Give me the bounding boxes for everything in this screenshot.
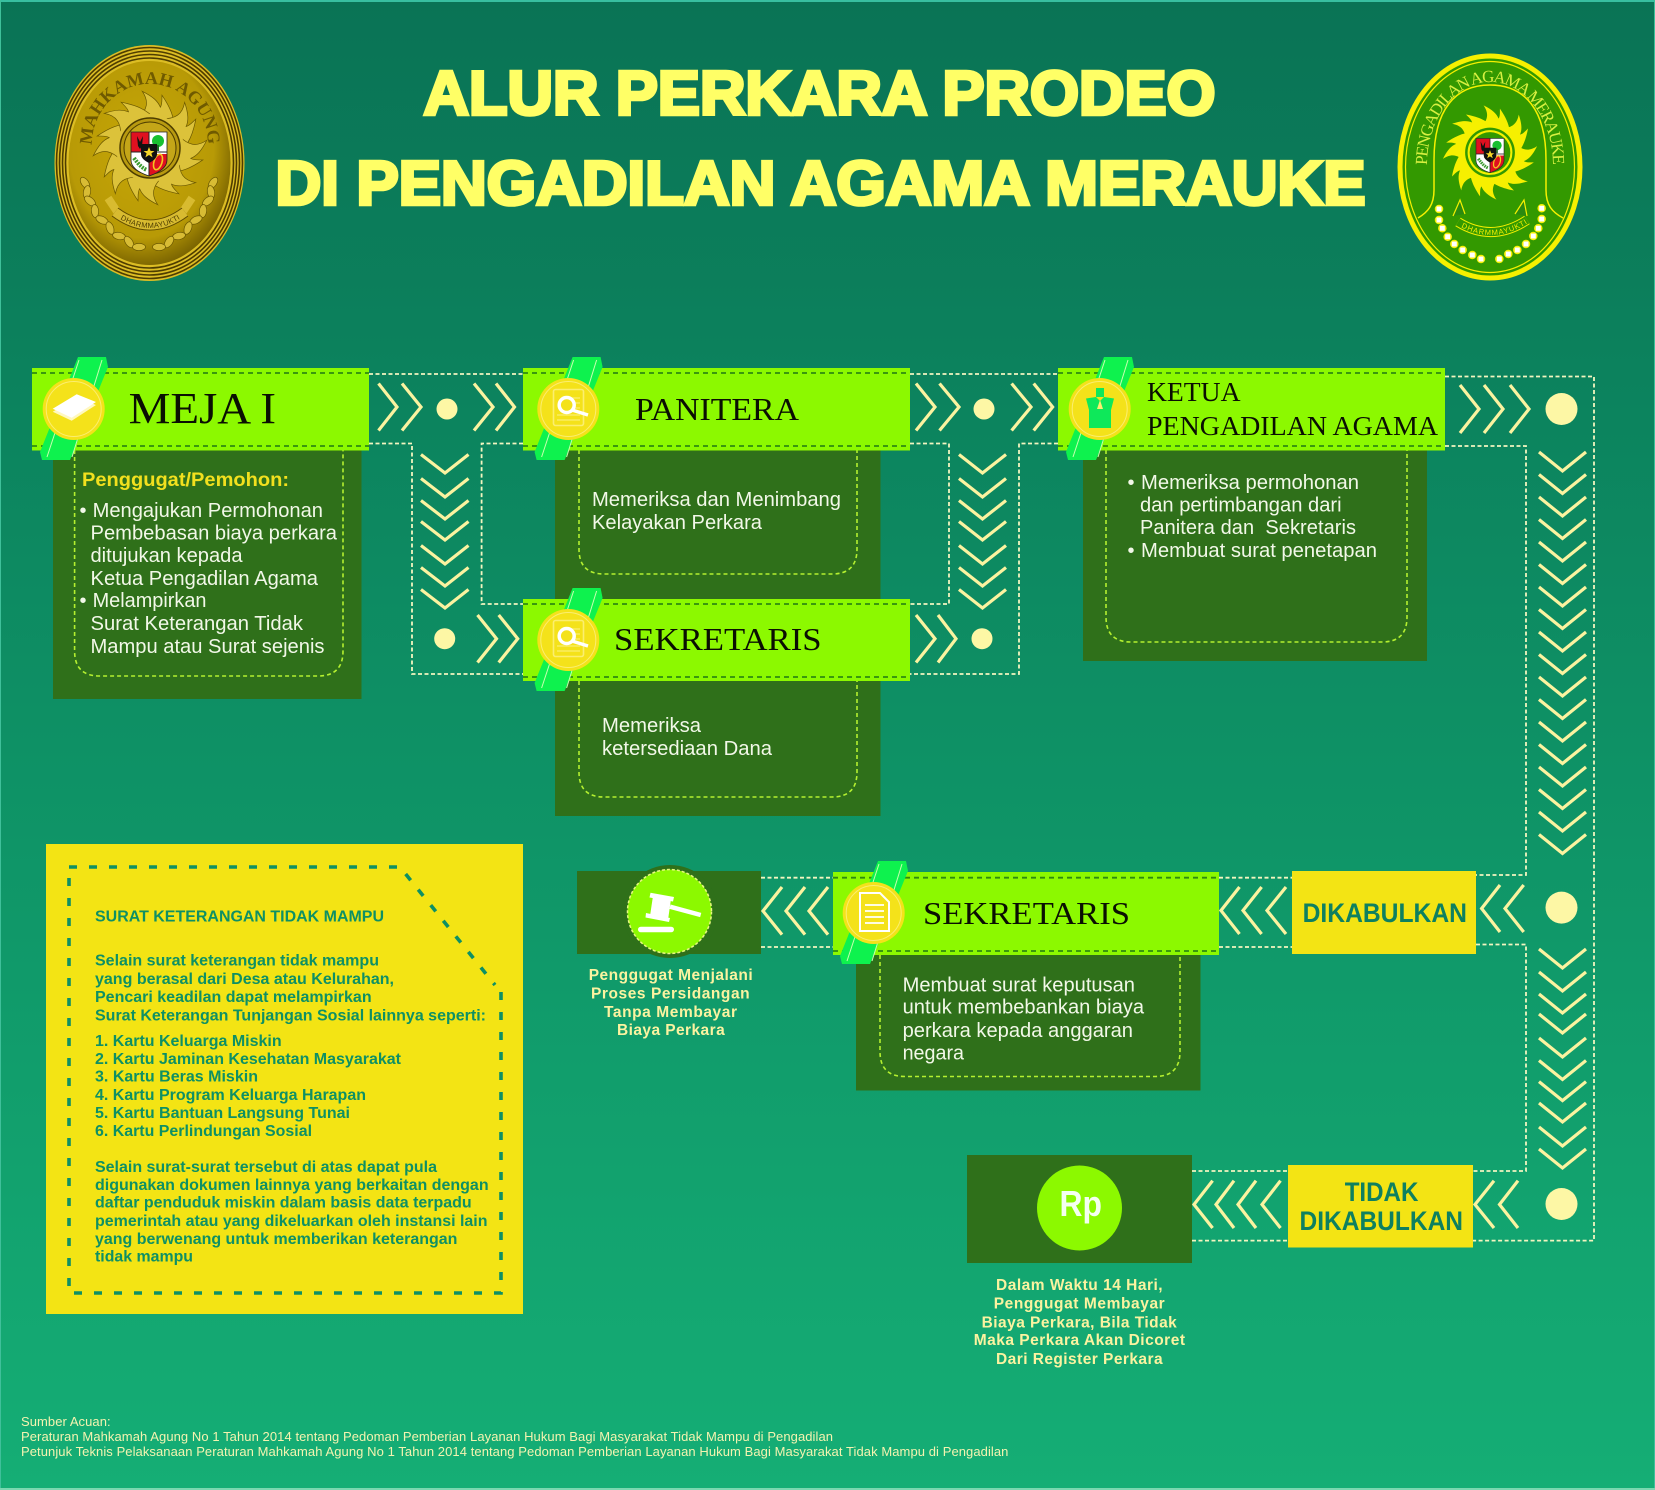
connector: dashed flow paths — [369, 374, 1594, 1241]
list: kartu: 5. Kartu Bantuan Langsung Tunai — [95, 1105, 350, 1122]
logo: Mahkamah Agung — [54, 45, 244, 281]
caption: Rp: Dalam Waktu 14 Hari, — [996, 1277, 1163, 1294]
icon: document — [840, 861, 908, 964]
icon: document magnifier — [535, 588, 603, 691]
text: Sekretaris duties — [602, 715, 773, 760]
icon: gavel — [638, 893, 701, 932]
caption: Rp: Dari Register Perkara — [996, 1351, 1163, 1368]
heading: Meja I: MEJA I — [129, 384, 276, 433]
text: Meja I duties: ditujukan kepada — [90, 545, 243, 567]
header bar: Sekretaris keputusan — [833, 861, 1219, 964]
panel: Sekretaris anggaran — [555, 681, 880, 816]
text: closing: yang berwenang untuk memberikan keterangan — [95, 1231, 457, 1248]
text: Meja I duties: Mengajukan Permohonan — [93, 500, 323, 522]
text: surat keputusan: perkara kepada anggaran — [903, 1020, 1133, 1042]
outcome box: Dikabulkan: DIKABULKAN — [1303, 898, 1467, 928]
icon: paper stack — [40, 357, 108, 460]
caption: gavel: Tanpa Membayar — [604, 1004, 737, 1021]
text: intro: Pencari keadilan dapat melampirkan — [95, 989, 372, 1006]
text: surat keputusan — [903, 975, 1145, 1064]
arrows: left chevrons — [763, 885, 1524, 1228]
text: Sekretaris duties: ketersediaan Dana — [602, 738, 773, 760]
list: kartu: 4. Kartu Program Keluarga Harapan — [95, 1087, 366, 1104]
header bar: Sekretaris — [523, 588, 910, 691]
text: closing: tidak mampu — [95, 1249, 193, 1266]
panel: Panitera — [555, 450, 880, 600]
list: kartu: 2. Kartu Jaminan Kesehatan Masyarakat — [95, 1051, 401, 1068]
caption: Rp: Maka Perkara Akan Dicoret — [974, 1332, 1185, 1349]
heading: Sekretaris: SEKRETARIS — [923, 895, 1130, 931]
caption: gavel: Biaya Perkara — [617, 1022, 725, 1039]
text: Meja I duties: Melampirkan — [93, 590, 206, 612]
heading: Ketua Pengadilan Agama: PENGADILAN AGAMA — [1147, 411, 1439, 441]
arrows: down chevrons, column 3 lower — [1539, 949, 1586, 1168]
sources: Sumber Acuan: — [21, 1414, 111, 1429]
arrows: down chevrons, column 3 upper — [1539, 452, 1586, 854]
list: kartu: 1. Kartu Keluarga Miskin — [95, 1033, 282, 1050]
header bar: Panitera — [523, 357, 910, 460]
text: Meja I duties: Ketua Pengadilan Agama — [90, 568, 319, 590]
logo: Pengadilan Agama Merauke: DHARMMAYUKTI — [1462, 219, 1527, 236]
text: closing: daftar penduduk miskin dalam basis data terpadu — [95, 1195, 472, 1212]
logo: Mahkamah Agung: DHARMMAYUKTI — [120, 214, 180, 228]
text: Ketua duties: • — [1128, 540, 1135, 562]
logo: Mahkamah Agung: MAHKAMAH AGUNG — [80, 72, 220, 145]
text: Sekretaris duties: Memeriksa — [602, 715, 702, 737]
caption: gavel — [589, 967, 753, 1039]
text: Panitera duties — [592, 489, 841, 534]
heading: Panitera: PANITERA — [635, 391, 799, 427]
title: ALUR PERKARA PRODEO — [424, 60, 1216, 128]
caption: Rp: Penggugat Membayar — [994, 1295, 1165, 1312]
header bar: Meja I — [32, 357, 369, 460]
arrows: right chevrons, row 1 — [378, 384, 1529, 433]
text: Ketua duties: Membuat surat penetapan — [1141, 540, 1377, 562]
text: Meja I duties: • — [80, 590, 87, 612]
panel: Rp — [967, 1155, 1192, 1263]
list: kartu: 6. Kartu Perlindungan Sosial — [95, 1123, 312, 1140]
text: Panitera duties: Kelayakan Perkara — [592, 512, 763, 534]
text: Ketua duties: dan pertimbangan dari — [1140, 494, 1342, 516]
logo: Pengadilan Agama Merauke: PENGADILAN AGAMA MERAUKE — [1416, 70, 1564, 164]
heading: Penggugat/Pemohon: Penggugat/Pemohon: — [82, 469, 289, 491]
arrows: down chevrons, column 2 — [959, 454, 1006, 608]
text: Meja I duties — [80, 500, 338, 658]
panel: gavel — [577, 865, 761, 958]
outcome box: Tidak Dikabulkan: DIKABULKAN — [1300, 1206, 1463, 1236]
panel: Surat Keterangan Tidak Mampu — [46, 844, 523, 1314]
text: closing — [95, 1159, 489, 1266]
icon: Rp: Rp — [1060, 1183, 1102, 1224]
text: Meja I duties: • — [80, 500, 87, 522]
header bar: Ketua Pengadilan Agama — [1058, 357, 1445, 460]
outcome box: Tidak Dikabulkan — [1288, 1165, 1473, 1248]
text: closing: Selain surat-surat tersebut di atas dapat pula — [95, 1159, 437, 1176]
text: Meja I duties: Surat Keterangan Tidak — [90, 613, 304, 635]
panel: Sekretaris keputusan — [856, 955, 1200, 1090]
icon: judge figure — [1066, 357, 1134, 460]
outcome box: Dikabulkan — [1292, 871, 1476, 954]
heading: Sekretaris: SEKRETARIS — [614, 621, 822, 657]
text: Ketua duties: Memeriksa permohonan — [1141, 472, 1359, 494]
caption: gavel: Penggugat Menjalani — [589, 967, 753, 984]
flow dots — [434, 393, 1578, 1220]
outcome box: Tidak Dikabulkan: TIDAK — [1345, 1177, 1419, 1207]
heading: Surat Keterangan Tidak Mampu: SURAT KETERANGAN TIDAK MAMPU — [95, 908, 384, 925]
text: intro: Surat Keterangan Tunjangan Sosial lainnya seperti: — [95, 1008, 486, 1025]
sources: Peraturan Mahkamah Agung No 1 Tahun 2014 tentang Pedoman Pemberian Layanan Hukum Bagi Masyarakat Tidak Mampu di Pengadilan — [21, 1429, 833, 1444]
text: intro: Selain surat keterangan tidak mampu — [95, 953, 379, 970]
text: surat keputusan: Membuat surat keputusan — [903, 975, 1135, 997]
list: kartu: 3. Kartu Beras Miskin — [95, 1068, 258, 1086]
text: intro — [95, 953, 486, 1025]
text: intro: yang berasal dari Desa atau Kelurahan, — [95, 971, 394, 988]
caption: gavel: Proses Persidangan — [591, 986, 750, 1002]
text: Ketua duties — [1128, 472, 1377, 562]
arrows: down chevrons, column 1 — [421, 454, 468, 608]
text: surat keputusan: negara — [903, 1042, 965, 1064]
panel: Meja I — [53, 450, 362, 699]
arrows: right chevrons, sekretaris row — [478, 615, 956, 662]
text: Meja I duties: Mampu atau Surat sejenis — [90, 636, 324, 658]
heading: Ketua Pengadilan Agama — [1147, 377, 1439, 441]
text: Meja I duties: Pembebasan biaya perkara — [90, 522, 338, 544]
text: Ketua duties: Panitera dan Sekretaris — [1140, 517, 1356, 539]
caption: Rp — [974, 1277, 1185, 1368]
sources: Petunjuk Teknis Pelaksanaan Peraturan Mahkamah Agung No 1 Tahun 2014 tentang Pedoman Pemberian Layanan Hukum Bagi Masyarakat Tidak Mampu di Pengadilan — [21, 1444, 1008, 1459]
caption: Rp: Biaya Perkara, Bila Tidak — [982, 1315, 1177, 1332]
text: Panitera duties: Memeriksa dan Menimbang — [592, 489, 841, 511]
icon: document magnifier — [535, 357, 603, 460]
panel: Ketua — [1083, 450, 1427, 661]
text: closing: digunakan dokumen lainnya yang berkaitan dengan — [95, 1177, 489, 1194]
text: Ketua duties: • — [1128, 472, 1135, 494]
heading: Ketua Pengadilan Agama: KETUA — [1147, 377, 1241, 407]
text: closing: pemerintah atau yang dikeluarkan oleh instansi lain — [95, 1213, 487, 1230]
logo: Pengadilan Agama Merauke — [1398, 54, 1582, 280]
title: DI PENGADILAN AGAMA MERAUKE — [276, 150, 1366, 218]
list: kartu — [95, 1033, 401, 1140]
text: surat keputusan: untuk membebankan biaya — [903, 997, 1145, 1019]
sources — [21, 1414, 1008, 1459]
title — [276, 60, 1366, 218]
